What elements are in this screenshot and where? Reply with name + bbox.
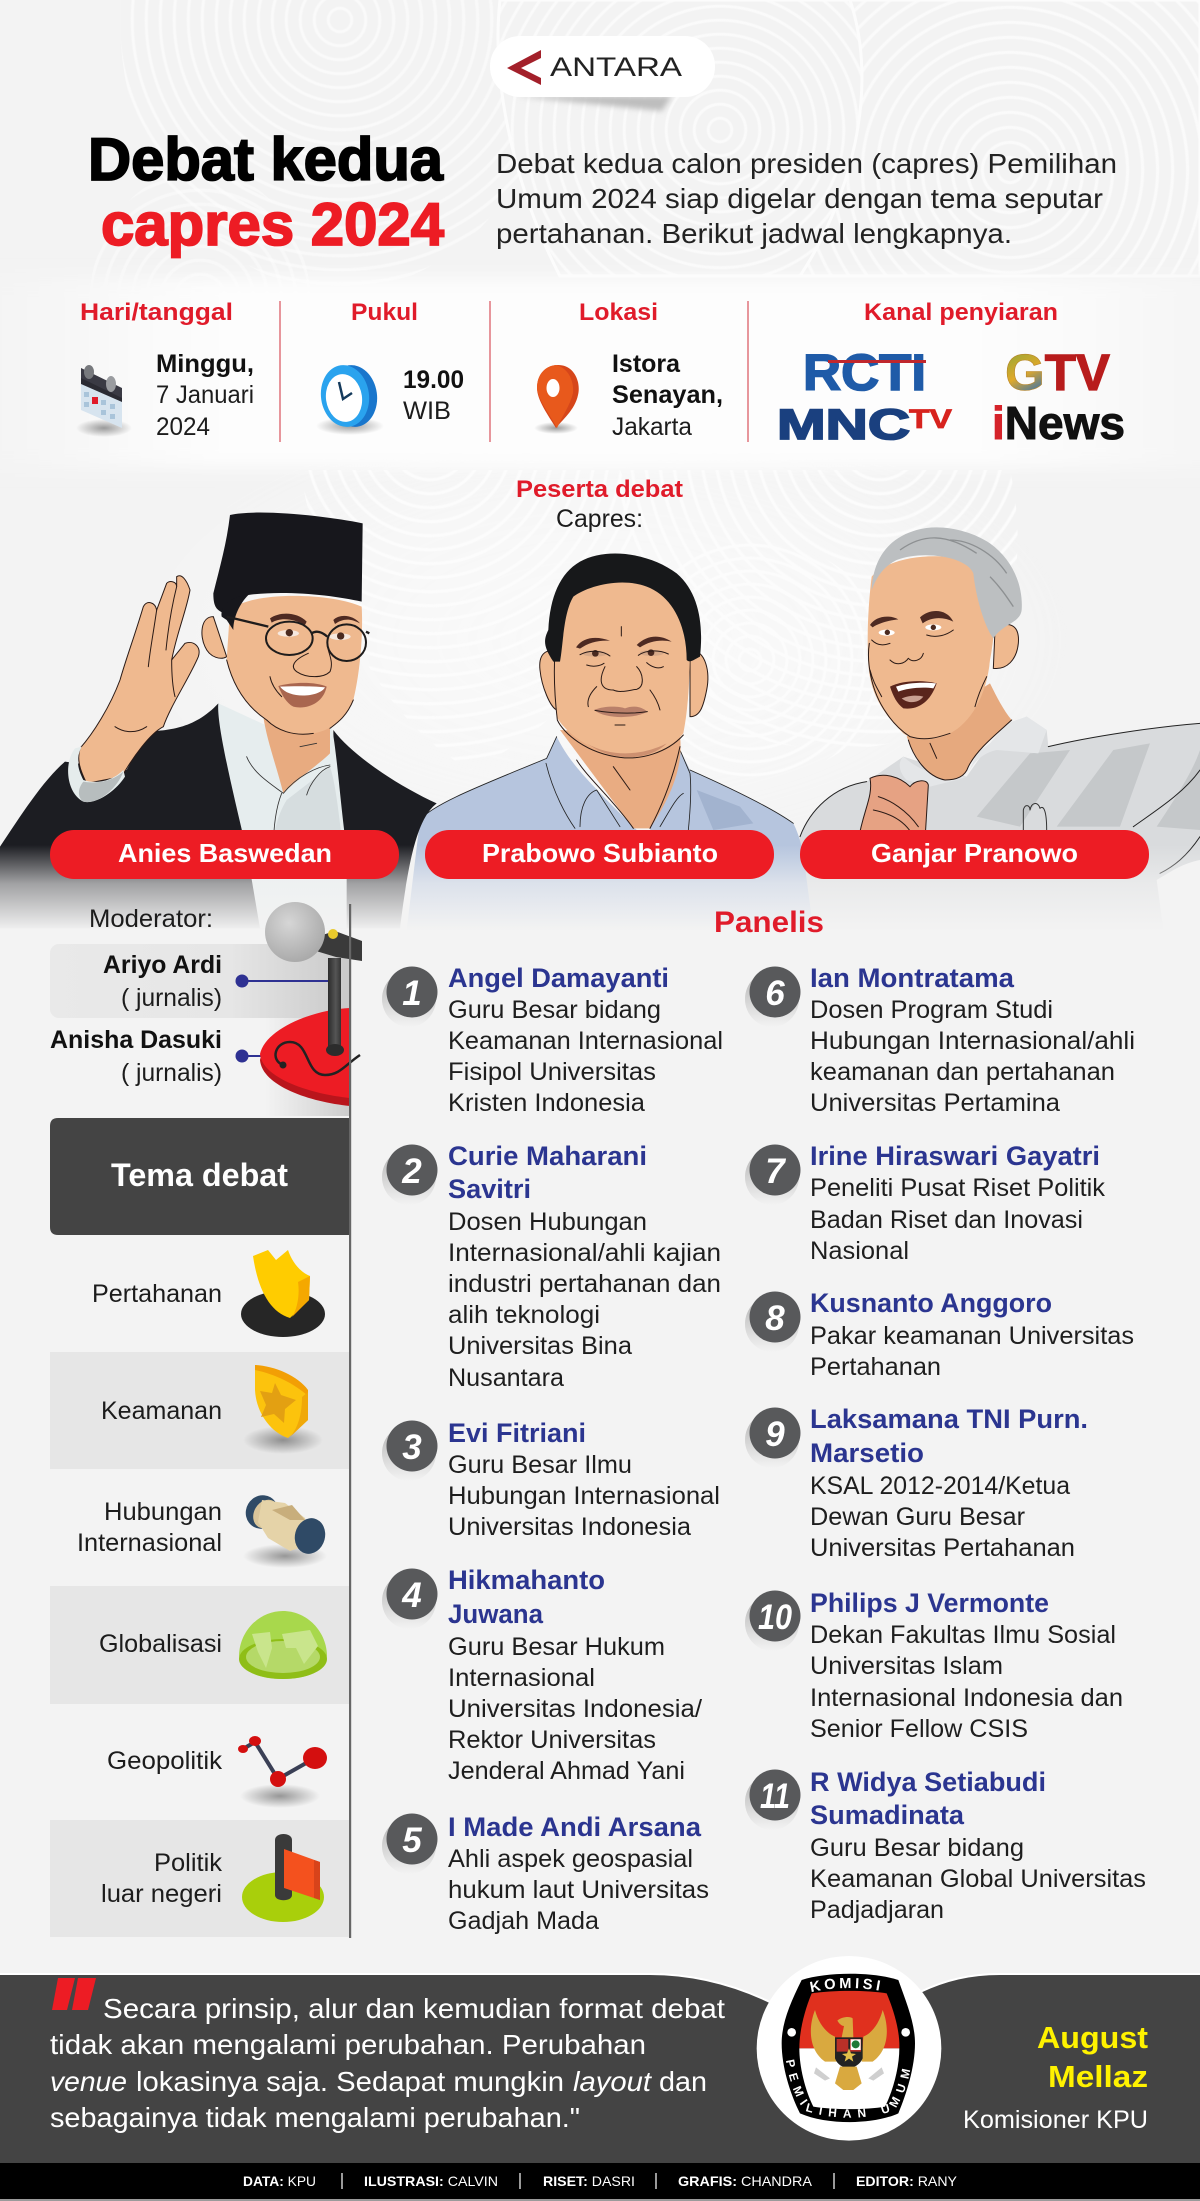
icon: connected nodes (238, 1736, 327, 1808)
panelist 4: Jenderal Ahmad Yani (448, 1757, 685, 1785)
panelist 1: Fisipol Universitas (448, 1058, 656, 1086)
panelist 9: Universitas Pertahanan (810, 1534, 1075, 1562)
panel: date: 7 Januari (156, 381, 254, 409)
panel: broadcast channels: Kanal penyiaran (864, 299, 1058, 326)
panelist 2: Universitas Bina (448, 1332, 632, 1360)
panelist 9: Marsetio (810, 1438, 924, 1468)
logo: ANTARA: ANTARA (550, 52, 682, 82)
panel: location: Lokasi (579, 299, 658, 326)
panelist 11: R Widya Setiabudi (810, 1767, 1046, 1797)
panelist 4: Hikmahanto (448, 1565, 605, 1595)
icon: microphone (260, 902, 362, 1106)
panelist 5: I Made Andi Arsana (448, 1812, 702, 1842)
panelist 5 (382, 1812, 709, 1935)
panelist 1: Guru Besar bidang (448, 996, 661, 1024)
quote text: venue (50, 2066, 127, 2097)
vertical divider (349, 904, 351, 1938)
title (88, 126, 445, 258)
quote text: layout (573, 2066, 652, 2097)
panelist 5: 5 (402, 1821, 422, 1860)
logo: MNCTV (777, 401, 952, 449)
panelist 8: Kusnanto Anggoro (810, 1288, 1052, 1318)
panelist 2: Curie Maharani (448, 1141, 647, 1171)
panel: moderator: Anisha Dasuki (50, 1026, 222, 1054)
panel: location: Istora (612, 350, 681, 378)
name pill: Prabowo (425, 830, 774, 879)
panelist 3: 3 (402, 1428, 422, 1467)
icon: calendar (76, 365, 132, 437)
name pill: Ganjar (800, 830, 1149, 879)
panel: moderator: Ariyo Ardi (103, 951, 222, 979)
panelist 7: 7 (765, 1152, 786, 1191)
panelist 2: Savitri (448, 1174, 531, 1204)
panelist 1: Keamanan Internasional (448, 1027, 723, 1055)
icon: globe (239, 1611, 327, 1679)
panelist 6: 6 (765, 974, 785, 1013)
panelist 10: Internasional Indonesia dan (810, 1684, 1123, 1712)
panelist 1 (382, 963, 723, 1117)
panelist 8: Pertahanan (810, 1353, 941, 1381)
panelist 7 (745, 1141, 1106, 1265)
name pill: Anies (50, 830, 399, 879)
heading: participants: Peserta debat (516, 476, 683, 503)
panel: date (76, 299, 254, 441)
theme: Politik luar negeri: Politik (154, 1849, 223, 1877)
panelist 2: Dosen Hubungan (448, 1208, 647, 1236)
panelist 9: Dewan Guru Besar (810, 1503, 1025, 1531)
title: capres 2024 (101, 191, 445, 258)
title: Debat kedua (88, 126, 444, 193)
logo: KPU (756, 1956, 942, 2141)
theme: Pertahanan: Pertahanan (92, 1280, 222, 1308)
panelist 6: keamanan dan pertahanan (810, 1058, 1115, 1086)
logo: iNews: iNews (992, 397, 1125, 449)
panelist 11: Padjadjaran (810, 1896, 944, 1924)
panel: moderator: ( jurnalis) (121, 984, 222, 1012)
quote text: sebagainya tidak mengalami perubahan." (50, 2102, 580, 2133)
panelist 9: KSAL 2012-2014/Ketua (810, 1472, 1070, 1500)
theme: Keamanan: Keamanan (101, 1397, 222, 1425)
panelist 7: Nasional (810, 1237, 909, 1265)
panelist 6: Ian Montratama (810, 963, 1015, 993)
panelist 3 (382, 1418, 720, 1541)
illustration: Ganjar Pranowo (787, 527, 1200, 930)
panel: time (316, 299, 464, 435)
fade under portraits (0, 845, 1200, 931)
panel: broadcast channels (777, 299, 1125, 449)
panelist 2: Nusantara (448, 1364, 564, 1392)
panel: date: 2024 (156, 413, 210, 441)
panelist 3: Evi Fitriani (448, 1418, 586, 1448)
panelist 6: Hubungan Internasional/ahli (810, 1027, 1135, 1055)
panelist 1: Kristen Indonesia (448, 1089, 645, 1117)
panelist 11: 11 (760, 1777, 790, 1816)
panel: moderator: Moderator: (89, 905, 213, 933)
heading: Panelis: Panelis (714, 906, 824, 939)
panelist 11: Keamanan Global Universitas (810, 1865, 1146, 1893)
icon: star shield (243, 1365, 323, 1454)
panelist 7: Peneliti Pusat Riset Politik (810, 1174, 1106, 1202)
theme: Geopolitik (107, 1736, 327, 1808)
panel: location: Senayan, (612, 381, 723, 409)
panelist 2: industri pertahanan dan (448, 1270, 721, 1298)
quote text: lokasinya saja. Sedapat mungkin (136, 2066, 564, 2097)
panelist 8: 8 (765, 1299, 785, 1338)
attribution: August (1037, 2020, 1148, 2055)
panelist 10: 10 (758, 1598, 792, 1637)
footer credits: RISET: DASRI (543, 2173, 635, 2189)
heading: Tema debat (50, 1118, 349, 1235)
panelist 3: Guru Besar Ilmu (448, 1451, 632, 1479)
panelist 5: hukum laut Universitas (448, 1876, 709, 1904)
panelist 4: Universitas Indonesia/ (448, 1695, 702, 1723)
panelist 10: Philips J Vermonte (810, 1588, 1049, 1618)
panelist 1: Angel Damayanti (448, 963, 669, 993)
theme: Geopolitik: Geopolitik (107, 1747, 223, 1775)
icon: map pin (534, 365, 579, 434)
theme: Politik luar negeri: luar negeri (101, 1880, 222, 1908)
logo: GTV: GTV (1005, 344, 1110, 401)
panel: date: Minggu, (156, 350, 254, 378)
panelist 10: Universitas Islam (810, 1652, 1003, 1680)
footer credits (0, 2163, 1200, 2201)
panelist 11: Sumadinata (810, 1800, 965, 1830)
heading: participants: Capres: (556, 505, 643, 533)
panelist 6 (745, 963, 1135, 1117)
theme: Globalisasi (50, 1586, 350, 1704)
icon: shield on base (241, 1250, 325, 1337)
attribution: Mellaz (1048, 2059, 1148, 2094)
panelist 8 (745, 1288, 1134, 1381)
logo: RCTI: RCTI (803, 344, 926, 401)
panel: debate themes (50, 1118, 350, 1937)
attribution: Komisioner KPU (963, 2106, 1148, 2134)
theme: Politik luar negeri (50, 1820, 350, 1937)
panel: date: Hari/tanggal (80, 299, 233, 326)
footer credits: DATA: KPU (243, 2173, 316, 2189)
panelist 9 (745, 1404, 1088, 1562)
intro text (496, 148, 1117, 249)
illustration: Anies Baswedan (0, 513, 437, 928)
attribution (963, 2020, 1148, 2134)
theme: Hubungan Internasional: Internasional (77, 1529, 222, 1557)
panelist 2: alih teknologi (448, 1301, 600, 1329)
theme: Pertahanan (92, 1250, 325, 1337)
heading: participants (516, 476, 683, 533)
panel: location (534, 299, 723, 441)
intro text: Debat kedua calon presiden (capres) Pemilihan (496, 148, 1117, 179)
panelist 5: Ahli aspek geospasial (448, 1845, 693, 1873)
quote text: dan (659, 2066, 707, 2097)
panelist 4: Rektor Universitas (448, 1726, 656, 1754)
quote text (50, 1993, 725, 2133)
panelist 2: 2 (401, 1152, 422, 1191)
icon: quotation mark (52, 1978, 96, 2010)
icon: flag (242, 1834, 324, 1922)
panelist 3: Hubungan Internasional (448, 1482, 720, 1510)
panelist 10: Senior Fellow CSIS (810, 1715, 1028, 1743)
intro text: pertahanan. Berikut jadwal lengkapnya. (496, 218, 1012, 249)
panelist 4: Internasional (448, 1664, 595, 1692)
panelist 4: Juwana (448, 1599, 544, 1629)
logo: ANTARA (490, 36, 715, 111)
panel: moderator (50, 902, 362, 1116)
panel: moderator: ( jurnalis) (121, 1059, 222, 1087)
panel: time: 19.00 (403, 366, 464, 394)
panelist 5: Gadjah Mada (448, 1907, 599, 1935)
panelist 4: Guru Besar Hukum (448, 1633, 665, 1661)
quote text: Secara prinsip, alur dan kemudian format debat (103, 1993, 725, 2024)
panelist 3: Universitas Indonesia (448, 1513, 691, 1541)
logo: KPU: PEMILIHAN UMUM (786, 2060, 910, 2118)
footer credits: EDITOR: RANY (856, 2173, 958, 2189)
logo: KPU: KOMISI (810, 1978, 880, 1992)
panelist 6: Dosen Program Studi (810, 996, 1053, 1024)
panelist 4 (382, 1565, 702, 1785)
panelist 7: Irine Hiraswari Gayatri (810, 1141, 1100, 1171)
panelist 1: 1 (402, 974, 422, 1013)
panelist 10 (745, 1588, 1123, 1743)
panel: time: WIB (403, 397, 451, 425)
footer credits: ILUSTRASI: CALVIN (364, 2173, 498, 2189)
theme: Globalisasi: Globalisasi (99, 1630, 222, 1658)
panelist 11 (745, 1767, 1146, 1924)
panelist 11: Guru Besar bidang (810, 1834, 1024, 1862)
panelist 7: Badan Riset dan Inovasi (810, 1206, 1083, 1234)
panel: time: Pukul (351, 299, 418, 326)
logo: MNCTV: MNC (777, 401, 910, 449)
panel: location: Jakarta (612, 413, 692, 441)
panelist 10: Dekan Fakultas Ilmu Sosial (810, 1621, 1116, 1649)
heading: Tema debat: Tema debat (111, 1157, 288, 1193)
panelist 2 (382, 1141, 721, 1392)
footer credits: GRAFIS: CHANDRA (678, 2173, 813, 2189)
icon: antara chevron (507, 50, 541, 85)
theme: Keamanan (50, 1352, 350, 1469)
quote text: tidak akan mengalami perubahan. Perubahan (50, 2029, 646, 2060)
illustration: Prabowo Subianto (407, 553, 813, 930)
panelist 2: Internasional/ahli kajian (448, 1239, 721, 1267)
panelist 6: Universitas Pertamina (810, 1089, 1060, 1117)
panelist 8: Pakar keamanan Universitas (810, 1322, 1134, 1350)
theme: Hubungan Internasional: Hubungan (104, 1498, 222, 1526)
icon: handshake (240, 1489, 329, 1568)
intro text: Umum 2024 siap digelar dengan tema seputar (496, 183, 1103, 214)
panelist 9: 9 (765, 1415, 785, 1454)
panelist 9: Laksamana TNI Purn. (810, 1404, 1088, 1434)
theme: Hubungan Internasional (77, 1489, 329, 1568)
panel: quote band (0, 1956, 1200, 2163)
logo: MNCTV: TV (909, 404, 952, 434)
panelist 4: 4 (401, 1576, 422, 1615)
name pill: Prabowo: Prabowo Subianto (482, 838, 718, 868)
name pill: Anies: Anies Baswedan (118, 838, 332, 868)
name pill: Ganjar: Ganjar Pranowo (871, 838, 1078, 868)
icon: clock (316, 362, 384, 435)
